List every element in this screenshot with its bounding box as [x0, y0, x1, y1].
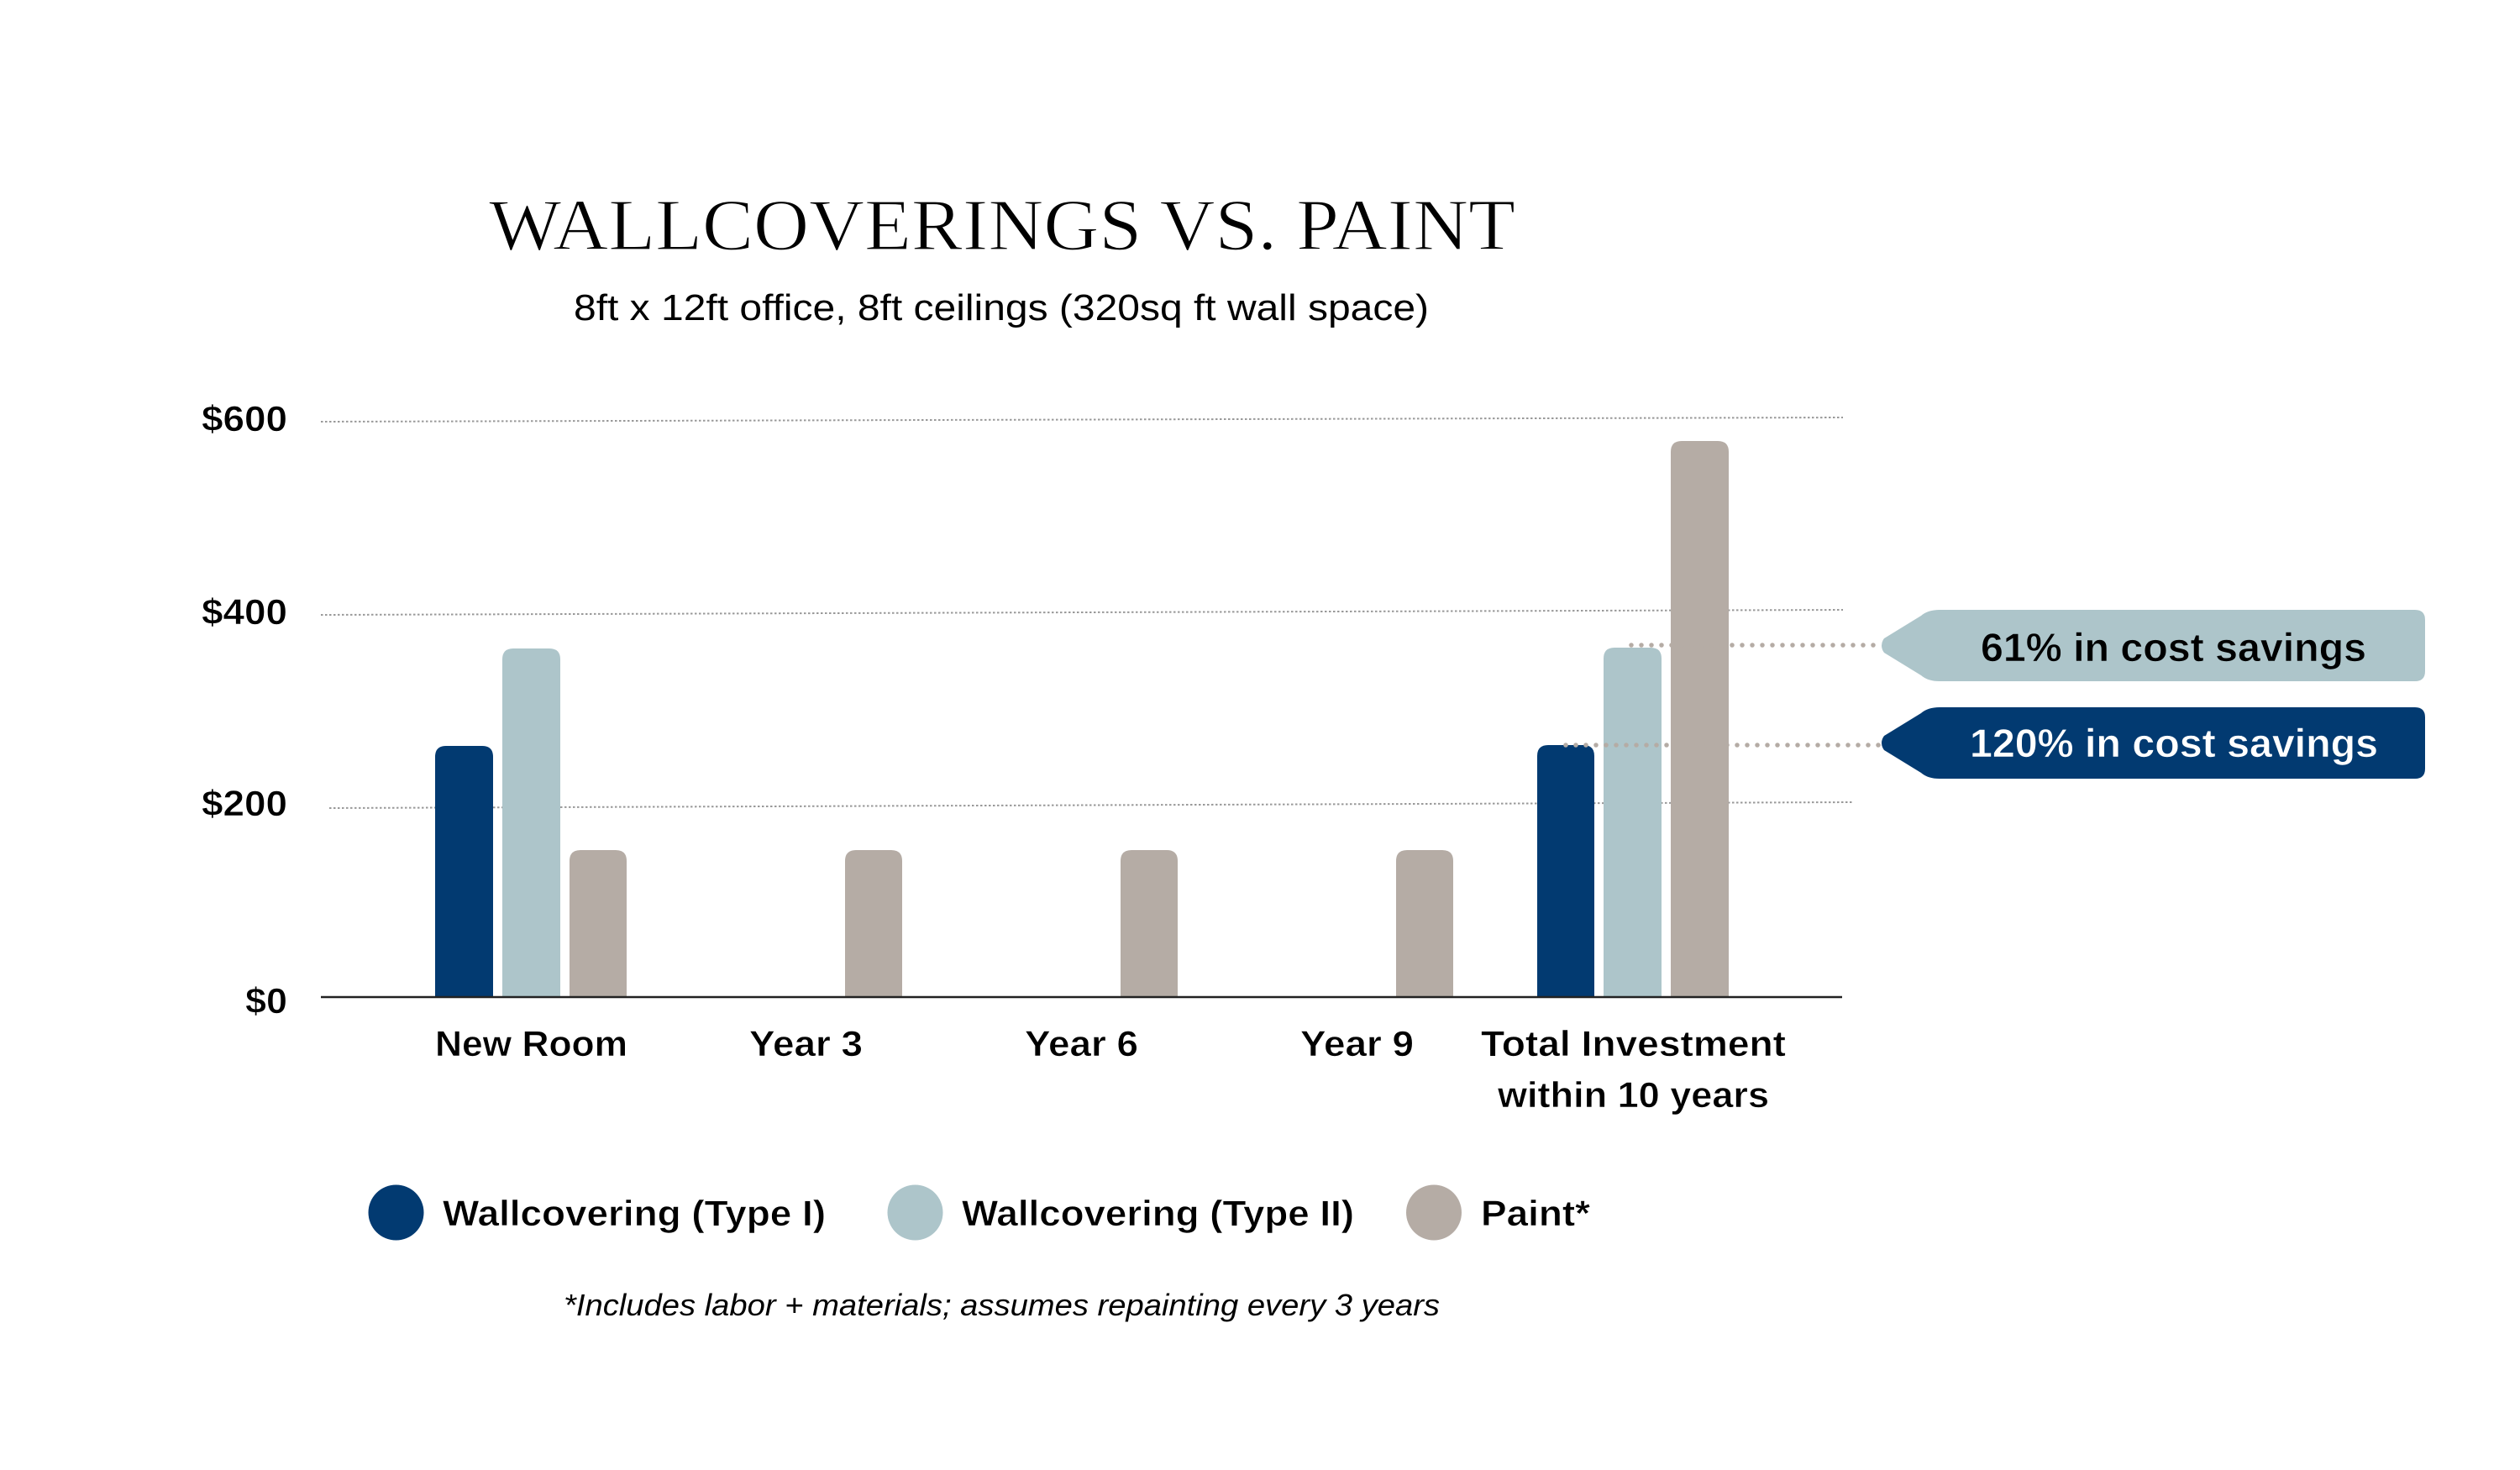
callout: 120% in cost savings [1882, 707, 2425, 779]
x-axis labels: Year 6 [1025, 1024, 1138, 1064]
title: WALLCOVERINGS VS. PAINT [489, 184, 1515, 265]
footnote: *Includes labor + materials; assumes repainting every 3 years [564, 1288, 1440, 1322]
legend [368, 1184, 1590, 1240]
legend item: Paint: Paint* [1481, 1194, 1590, 1234]
subtitle: 8ft x 12ft office, 8ft ceilings (320sq ft wall space) [574, 287, 1429, 328]
x-axis labels: Year 3 [749, 1024, 863, 1064]
y-axis labels: $0 [245, 981, 287, 1021]
legend item: Wallcovering Type I [368, 1184, 826, 1240]
x-axis labels: New Room [435, 1024, 627, 1064]
legend item: Wallcovering Type I: Wallcovering (Type I) [443, 1194, 826, 1234]
legend item: Wallcovering Type II [887, 1184, 1354, 1240]
x-axis labels [435, 1024, 1786, 1116]
bars: New Room [435, 648, 627, 997]
callout: 120% in cost savings: 120% in cost savings [1970, 721, 2378, 765]
callout: 61% in cost savings: 61% in cost savings [1981, 625, 2366, 669]
y-axis labels: $600 [202, 399, 287, 439]
legend item: Paint [1406, 1184, 1590, 1240]
bar: Year 6 paint [1121, 850, 1178, 997]
connector: 61% savings dotted line [1631, 643, 1882, 648]
x-axis labels: Year 9 [1300, 1024, 1414, 1064]
bar: Year 9 paint [1396, 850, 1453, 997]
bars: Total Investment [1537, 441, 1729, 997]
bar chart [202, 399, 1852, 1116]
x-axis labels: within 10 years [1497, 1075, 1769, 1116]
y-axis labels [202, 399, 287, 1021]
y-axis labels: $200 [202, 784, 287, 824]
bar: Year 3 paint [845, 850, 902, 997]
connector: 120% savings dotted line [1566, 743, 1885, 748]
callout: 61% in cost savings [1882, 610, 2425, 681]
x-axis labels: Total Investment [1481, 1024, 1786, 1064]
legend item: Wallcovering Type II: Wallcovering (Type II) [962, 1194, 1354, 1234]
y-axis labels: $400 [202, 592, 287, 633]
